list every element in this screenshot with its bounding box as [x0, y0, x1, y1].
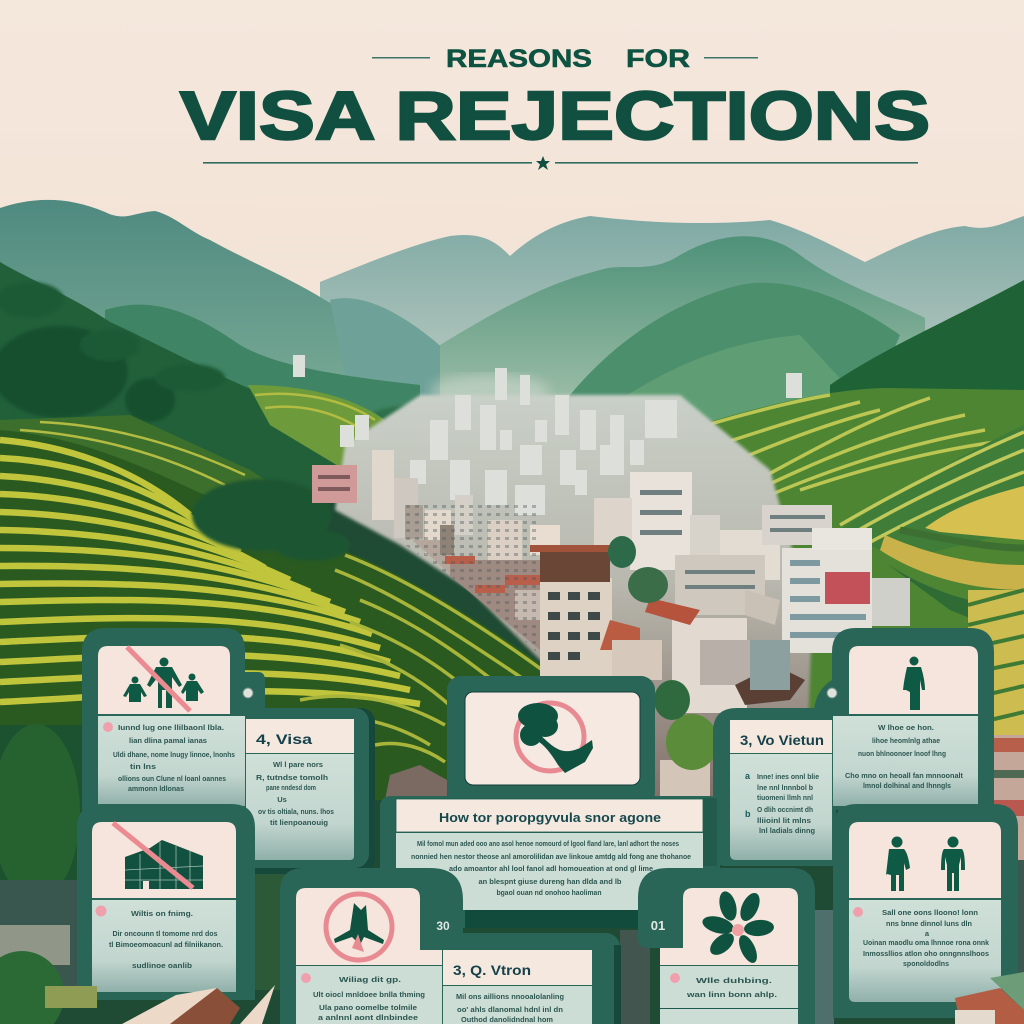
heading strip: [396, 799, 703, 832]
body text: Mil ons aillions nnooalolanling: [456, 992, 564, 1001]
body text: Iunnd lug one llilbaonl lbla.: [118, 723, 224, 732]
body text: [849, 900, 1001, 1002]
body text: ov tis oltiala, nuns. lhos: [258, 807, 334, 816]
icon: building with slash: [113, 823, 203, 889]
body text: Outhod danolidndnal hom: [461, 1015, 553, 1024]
body text: tiuomeni llmh nnl: [757, 793, 813, 802]
body text: [246, 754, 354, 860]
card: bottom centre with flower icon: [638, 868, 815, 1024]
body text: Wl l pare nors: [273, 760, 323, 769]
haze over valley: [430, 374, 550, 410]
body text: [296, 966, 442, 1024]
icon: flower: [700, 889, 775, 966]
body text: [660, 966, 798, 1024]
body text: sudlinoe oanlib: [132, 961, 192, 970]
kicker: reasons for: REASONS: [446, 45, 592, 73]
body text: pane nndesd dom: [266, 783, 316, 792]
body text: sponoldodlns: [903, 959, 949, 968]
body text: Cho mno on heoall fan mnnoonalt: [845, 771, 963, 780]
title block: [180, 45, 930, 170]
lower left trees behind cards: [0, 725, 100, 905]
body text: [730, 754, 832, 860]
heading: How tor poropgyvula snor agone: [439, 810, 661, 825]
rule with star: [203, 156, 918, 170]
icon panel: [296, 888, 442, 965]
icon: person: [903, 656, 925, 710]
icon panel: [849, 822, 1001, 898]
body text: R, tutndse tomolh: [256, 773, 328, 782]
card: how to paragraph: [380, 796, 720, 928]
upper left terrace: [248, 385, 385, 470]
mid city buildings: [312, 450, 832, 655]
right terraces: [610, 388, 1024, 760]
body text: nns bnne dinnol luns dln: [886, 919, 972, 928]
card: centre top with map icon: [447, 676, 655, 806]
body text: Inmossllios atlon oho onngnnslhoos: [863, 949, 989, 958]
street trees: [608, 536, 718, 770]
badge: 30: [436, 919, 450, 933]
heading strip: [443, 950, 592, 985]
body text: lian dlina pamal ianas: [129, 736, 207, 745]
body text: a anlnnl aont dlnbindee: [318, 1013, 418, 1022]
far mountains: [320, 216, 1024, 420]
heading strip: [246, 719, 354, 753]
body text: nonnied hen nestor theose anl amorolilidan ave linkoue amtdg ald fong ane thohanoe: [411, 852, 691, 861]
heading: 4, Visa: [256, 731, 312, 747]
body text: nuon bhlnoonoer lnoof lhng: [858, 749, 946, 758]
body text: ado amoantor ahl lool fanol adl homoueation at ond gl lime: [449, 864, 653, 873]
badge: 01: [651, 918, 665, 933]
card: 4, Visa: [232, 708, 375, 874]
badge: [827, 688, 837, 698]
orange terrace lobe: [925, 486, 1024, 540]
street below cards: [620, 930, 650, 1024]
body text: Wiliag dit gp.: [339, 975, 401, 984]
icon panel: [849, 646, 978, 714]
kicker: reasons for: FOR: [626, 45, 690, 73]
heading: 3, Vo Vietun: [740, 733, 824, 748]
body text: lliioinl lit mlns: [757, 816, 811, 825]
icon panel: [98, 646, 230, 714]
card: 3, Q. Vtron: [430, 933, 621, 1024]
body text: Uoinan maodlu oma lhnnoe rona onnk: [863, 938, 990, 947]
body text: Mil fomol mun aded ooo ano asol henoe nomourd of lgool fland lare, lanl adhort the noses: [417, 839, 679, 848]
mid green hills: [440, 236, 925, 430]
body text: Wlle duhbing.: [696, 976, 772, 985]
lower right terrace: [968, 590, 1024, 740]
body text: [833, 716, 978, 806]
body text: Ula pano oomelbe tolmile: [319, 1003, 417, 1012]
icon panel: [660, 888, 798, 965]
body text: wan linn bonn ahlp.: [686, 990, 777, 999]
body text: Inne! ines onnl blie: [757, 772, 819, 781]
body text: [396, 833, 703, 910]
body text: a: [745, 771, 751, 781]
body text: Wiltis on fnimg.: [131, 909, 193, 918]
card: building restrictions: [77, 804, 255, 1000]
body text: oo' ahls dlanomal hdnl inl dn: [457, 1005, 563, 1014]
body text: lmnol dolhinal and lhnngls: [863, 781, 951, 790]
main terraced field: [0, 430, 552, 800]
body text: ollions oun Clune nl loanl oannes: [118, 774, 226, 783]
body text: Uldi dhane, nome lnugy linnoe, lnonhs: [113, 750, 235, 759]
card: bottom centre with crossed icon: [280, 868, 463, 1024]
card: 3, Vo Vietnam: [703, 708, 836, 866]
body text: a: [925, 929, 930, 938]
right edge buildings: [992, 735, 1024, 1020]
body text: Dir oncounn tl tomome nrd dos: [112, 929, 218, 938]
lower ground base: [0, 420, 1024, 1024]
badge: [243, 688, 253, 698]
left forest: [0, 262, 345, 500]
left mountains: [0, 200, 430, 430]
body text: an blespnt giuse dureng han dlda and lb: [478, 877, 622, 886]
body text: [443, 986, 592, 1024]
body text: [98, 716, 245, 806]
body text: lnl ladials dinng: [759, 826, 815, 835]
right forest: [830, 280, 1024, 420]
low roofs and shops: [385, 590, 805, 800]
body text: bgaol ouan nd onohoo haoliman: [496, 888, 602, 897]
heading: 3, Q. Vtron: [453, 962, 531, 978]
body text: tin lns: [130, 762, 156, 771]
body text: ammonn ldlonas: [128, 784, 184, 793]
body text: W lhoe oe hon.: [878, 723, 934, 732]
kicker: reasons for: [372, 45, 758, 73]
sky: [0, 0, 1024, 420]
heading strip: [730, 720, 832, 753]
distant city: [335, 395, 812, 810]
body text: tl Bimoeomoacunl ad filniikanon.: [109, 940, 223, 949]
icon: family with slash: [123, 647, 204, 711]
body text: O dlih occnimt dh: [757, 805, 813, 814]
main title: VISA REJECTIONS: [180, 78, 930, 154]
icon: two people: [886, 836, 965, 891]
body text: lne nnl lnnnbol b: [757, 783, 813, 792]
icon: leaf hands in prohibition ring: [326, 894, 392, 960]
icon panel: [92, 822, 236, 898]
white corner building: [782, 528, 910, 653]
body text: tit lienpoanouig: [270, 818, 328, 827]
body text: Ult oiocl mnldoee bnlla thming: [313, 990, 425, 999]
card: single person: [814, 628, 994, 810]
body text: lihoe heomlnlg athae: [872, 736, 940, 745]
icon: map in prohibition ring: [516, 703, 593, 773]
left tree: [0, 724, 90, 1024]
body text: b: [745, 809, 751, 819]
body text: [92, 900, 236, 992]
foreground rooftops: [45, 972, 1024, 1024]
tower with brown roof: [530, 545, 612, 676]
body text: Sall one oons lloono! lonn: [882, 908, 978, 917]
card: family restrictions: [82, 628, 265, 810]
body text: Us: [277, 795, 287, 804]
dark tree belt: [192, 479, 350, 561]
card: two people: [833, 804, 1018, 1018]
